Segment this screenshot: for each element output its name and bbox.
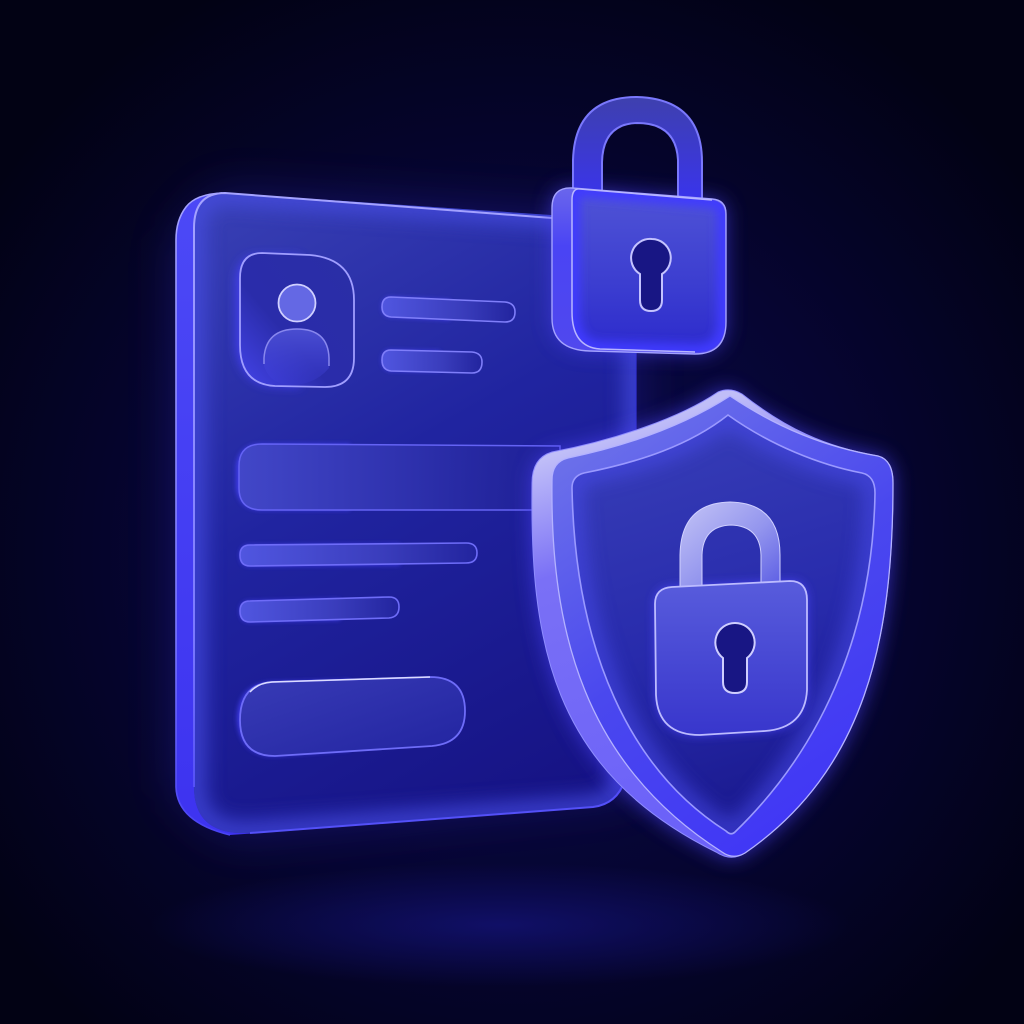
profile text line 1 xyxy=(382,297,515,322)
keyhole xyxy=(715,623,755,693)
shield side rim xyxy=(532,390,893,857)
wide field xyxy=(236,444,560,510)
icon: padlock xyxy=(552,97,726,354)
text line 3 xyxy=(240,543,477,566)
avatar shoulders xyxy=(264,329,329,385)
avatar tile xyxy=(236,253,354,387)
avatar head xyxy=(278,284,316,322)
icon: shield xyxy=(532,390,893,857)
lock side xyxy=(552,188,726,354)
shackle xyxy=(680,502,780,587)
shield padlock xyxy=(655,502,807,735)
shield plate xyxy=(572,415,875,834)
lock body xyxy=(655,581,807,735)
shield front rim xyxy=(552,396,893,856)
shackle xyxy=(573,97,702,200)
keyhole xyxy=(631,239,671,311)
floor glow xyxy=(150,863,850,987)
lock body xyxy=(572,189,725,352)
text line 4 xyxy=(240,597,399,622)
button xyxy=(237,677,465,756)
panel: profile card xyxy=(176,193,636,835)
profile text line 2 xyxy=(382,350,482,373)
